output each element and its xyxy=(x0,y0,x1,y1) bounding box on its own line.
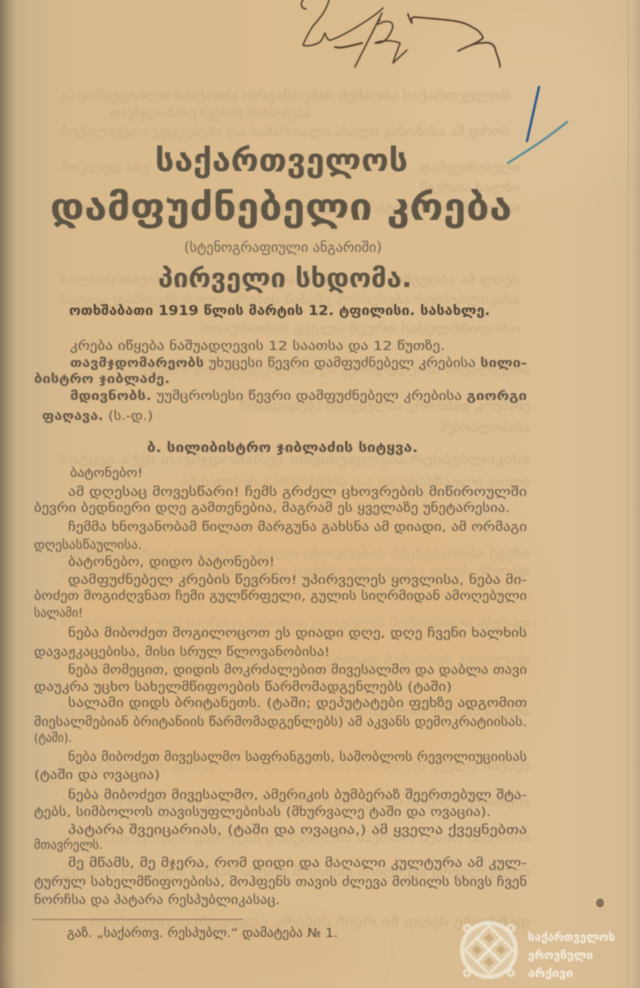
bleed-through text: საზოგადოების გამგეობა ხალხის ნებით წარმოებს ყველა საქმეს xyxy=(60,758,530,773)
opening paragraph: თავმჯდომარეობს უხუცესი წევრი დამფუძნებელ კრებისა სილი- xyxy=(70,355,527,370)
bleed-through text: ქვეყნის წინსვლა მოქალაქეთა შრომით მიიღწევა ყოველ დღეს xyxy=(60,864,530,879)
bleed-through text: ქვეყნის დამოუკიდებლობა და კეთილდღეობა მოქალაქეთა xyxy=(140,362,530,377)
archive logo xyxy=(462,923,516,977)
opening paragraph: მდივნობს. უუმცროსესი წევრი დამფუძნებელ კრებისა გიორგი xyxy=(70,388,527,403)
speech body: (ტაში). xyxy=(34,730,72,745)
bleed-through text: მთავრობის ყველა წევრი სახელმწიფოსი xyxy=(200,321,520,336)
speech body: დავაჟკაცებისა, მისი სრულ წლოვანობისა! xyxy=(34,644,330,659)
speech body: ბოძეთ მოგიძღვნათ ჩემი გულწრფელი, გულის სიღრმიდან ამოღებული xyxy=(34,588,527,603)
bleed-through text xyxy=(60,88,530,929)
archive name: საქართველოს xyxy=(528,930,615,944)
bleed-through text: კრების წევრთა სიტყვა საქართველოს დემოკრატიული რესპუბლიკა xyxy=(60,200,520,215)
date line: ოთხშაბათი 1919 წლის მარტის 12. ტფილისი. სასახლე. xyxy=(69,304,490,319)
printed text xyxy=(32,143,527,940)
title: line 1: საქართველოს xyxy=(155,143,408,179)
archive name: ეროვნული xyxy=(528,948,593,962)
speech body: ტურულ სახელმწიფოებისა, მოჰფენს თავის ძლევა მოსილს სხივს ჩვენ xyxy=(34,874,527,889)
speech body: ტებს, სიმბოლოს თავისუფლებისას (მხურვალე ტაში და ოვაცია). xyxy=(34,804,491,819)
speech body: პატარა შვეიცარიას, (ტაში და ოვაცია,) ამ ყველა ქვეყნებთა xyxy=(68,822,527,837)
speech body: მთავრელს. xyxy=(34,837,103,852)
speech body: ნორჩსა და პატარა რესპუბლიკასაც. xyxy=(34,892,280,907)
bleed-through text: მეზობლობისა xyxy=(440,420,530,435)
bleed-through text: მოკლედ ისე xyxy=(60,160,150,175)
blue pencil mark xyxy=(508,87,567,163)
bleed-through text: ამ დროს მიღებული კანონი რესპუბლიკის ყველა მოქალაქისათვის xyxy=(60,794,530,809)
speech body: დაუკრა უცხო სახელმწიფოების წარმომადგენლებს (ტაში) xyxy=(34,679,452,694)
speech body xyxy=(34,465,527,907)
speech body: სალამი დიდს ბრიტანეთს. (ტაში; დეპუტატები ფეხზე ადგომით xyxy=(68,695,527,710)
archive name: არქივი xyxy=(528,966,573,980)
speech body: მიესალმებიან ბრიტანიის წარმომადგენლებს) ამ აკვანს დემოკრატიისას. xyxy=(34,714,527,729)
speech body: ჩემმა ხნოვანობამ წილათ მარგუნა გახსნა ამ დიადი, ამ ორმაგი xyxy=(68,519,527,534)
bleed-through text: მოქალაქეთა უფლებები და სამართალი ახალი კანონისა ამ დროს xyxy=(60,124,510,139)
bleed-through text: მუშაობა საზოგადოებისა ახალი ცხოვრების მშენებლობა ჩვენი xyxy=(60,546,530,561)
speech body: ბევრი ბედნიერი დღე გამთენებია, მაგრამ ეს ყველაზე უნეტარესია. xyxy=(34,500,510,515)
speech body: ნება მიბოძეთ მოგილოცოთ ეს დიადი დღე, დღე ჩვენი ხალხის xyxy=(68,625,527,640)
opening paragraph: კრება იწყება ნაშუადღევის 12 საათსა და 12 წუთზე. xyxy=(70,338,445,353)
bleed-through text: ხალხის თავისუფლება და ძმობა მთავრობის გამგეობა ამ დღეს xyxy=(60,272,520,287)
speech body: ბატონებო, დიდო ბატონებო! xyxy=(68,554,275,569)
speech body: დამფუძნებელ კრების წევრნო! უპირველეს ყოვლისა, ნება მი- xyxy=(68,572,527,587)
stain xyxy=(596,898,604,908)
bleed-through text: წინადადება მიღებულია ერთხმად კრებაზე xyxy=(240,398,530,413)
session heading: პირველი სხდომა. xyxy=(158,264,412,294)
bleed-through text: რომელიც დამტკიცდა კრების მიერ ამ დღეს ერთხმად xyxy=(90,914,530,929)
bleed-through text: ჩვენი რესპუბლიკის მშვიდობიანი მომავალი საერთო მიზანია ყველა xyxy=(60,704,530,719)
bleed-through text: თავმჯდომარე წევრის მოხსენება xyxy=(110,106,310,121)
speech body: (ტაში და ოვაცია) xyxy=(34,767,160,782)
bleed-through text: წევრთა ხალხი xyxy=(420,180,520,195)
speech body: სალამი! xyxy=(34,605,83,620)
bleed-through text: ქვეყნის ყველა კუთხე ამ დიად საქმეს უერთდება დღეს ერთად xyxy=(60,563,530,578)
bleed-through text: ამ ხალხის გამარჯვება და დღესასწაული დიდი xyxy=(180,474,530,489)
speech body: ნება მომეცით, დიდის მოკრძალებით მივესალმო და დაბლა თავი xyxy=(68,662,527,677)
speech heading: ბ. სილიბისტრო ჯიბლაძის სიტყვა. xyxy=(147,441,418,456)
speech body: ნება მიბოძეთ მივესალმო, ამერიკის ბუმბერაზ შეერთებულ შტა- xyxy=(68,787,527,802)
opening paragraph: ფაღავა. (ს.-დ.) xyxy=(42,408,153,423)
footnote: გაზ. „საქართვ. რესპუბლ.“ დამატება № 1. xyxy=(67,925,338,940)
bleed-through text: დამფუძნებელი xyxy=(420,160,520,175)
archive name xyxy=(528,930,615,980)
bleed-through text: პარლამენტი და მთავრობა ერთად მუშაობენ კეთილად xyxy=(120,652,530,667)
bleed-through text: სიტყვა აქვს თავმჯდომარეს თავისუფლება რესპუბლიკისა xyxy=(60,452,530,467)
bleed-through text: ახალი ცხოვრების კანონები დაწერილია საერთო ნებით ხალხისა xyxy=(60,830,530,845)
handwritten signature xyxy=(301,0,500,67)
bleed-through text: სიტყვა დამფუძნებელი კრების წინაშე მოხსენება რესპუბლიკისა xyxy=(60,292,520,307)
speech body: ნება მიბოძეთ მივესალმო საფრანგეთს, საშობლოს რევოლიუციისას xyxy=(68,749,527,764)
speech body: ბატონებო! xyxy=(70,465,143,480)
title: line 2: დამფუძნებელი კრება xyxy=(50,185,512,229)
bleed-through text: თავისუფალი ერი საერთო კანონით ცხოვრობს მოწყობილი ძმურად xyxy=(60,615,530,630)
speech body: დღესასწაულისა. xyxy=(34,537,142,552)
speech body: ამ დღესაც მოვესწარი! ჩემს გრძელ ცხოვრების მიწიროულში xyxy=(68,484,527,499)
subtitle: (სტენოგრაფიული ანგარიში) xyxy=(184,239,382,256)
bleed-through text: გადაწყვეტილი საბჭოთა ორგანოების მუშაობა საქართველოს xyxy=(60,88,510,103)
speech body: მე მწამს, მე მჯერა, რომ დიდი და მაღალი კულტურა ამ კულ- xyxy=(68,855,527,870)
opening paragraph xyxy=(34,338,527,423)
opening paragraph: ბისტრო ჯიბლაძე. xyxy=(34,371,170,386)
